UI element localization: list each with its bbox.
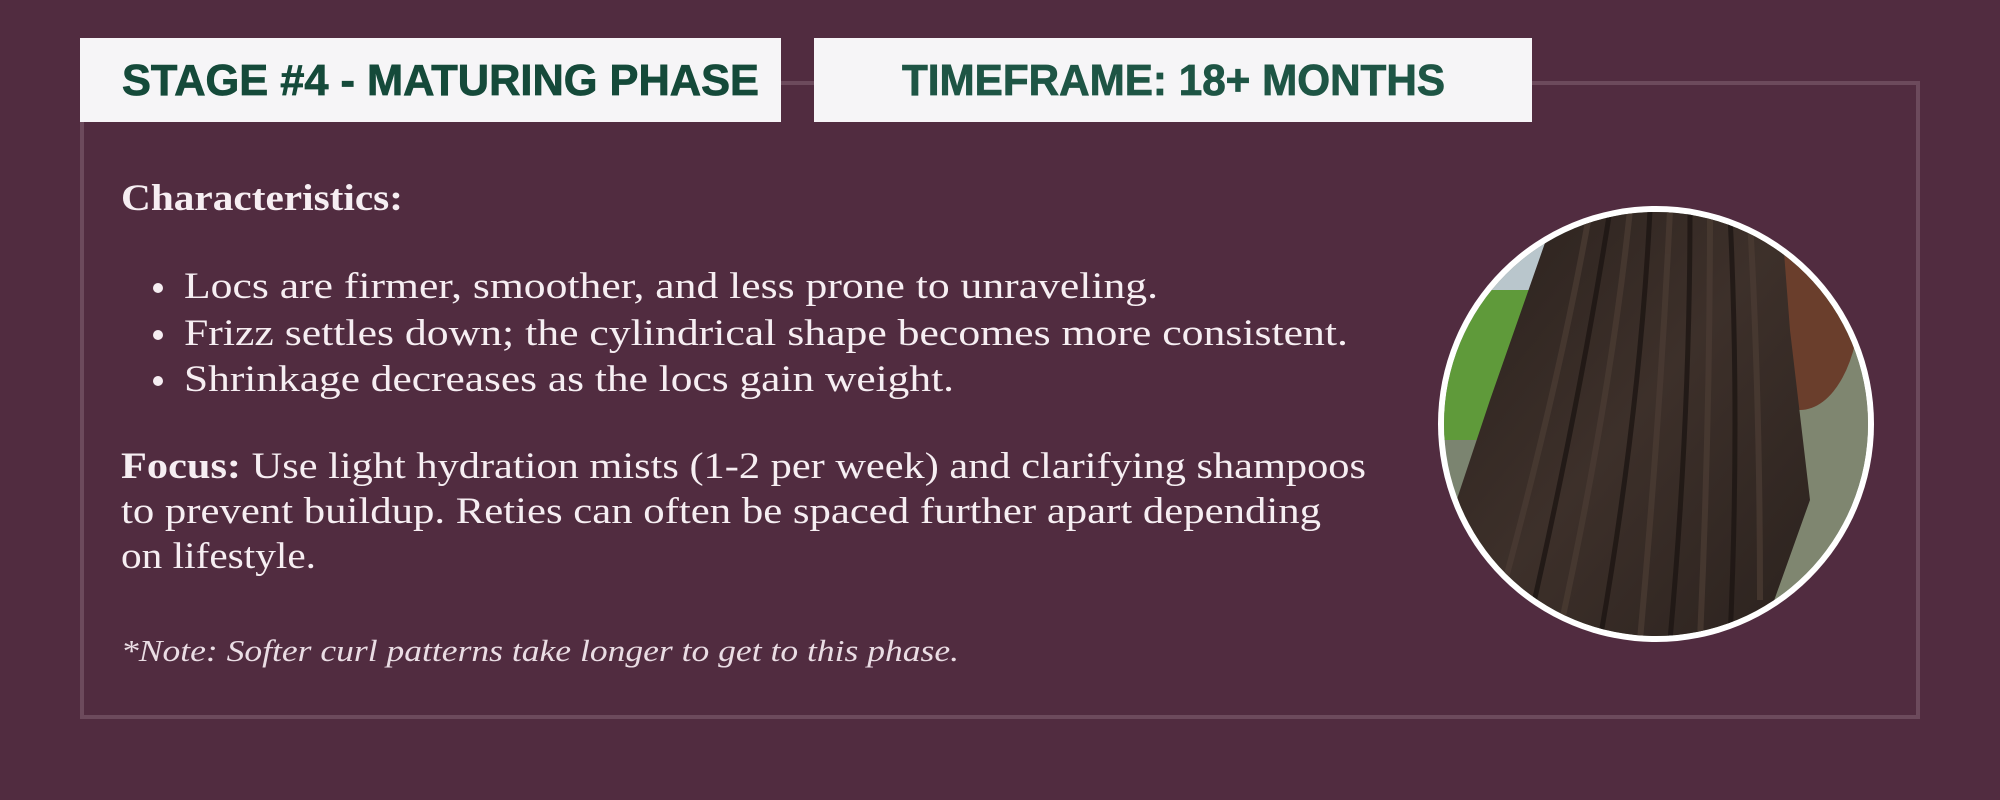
text block: characteristics: Shrinkage decreases as the locs gain weight.: [184, 359, 954, 400]
text block: focus: Focus: Use light hydration mists (1-2 per week) and clarifying shampoos: [121, 446, 1366, 487]
text block: focus: on lifestyle.: [121, 536, 316, 577]
heading: stage label: [80, 38, 781, 122]
photo: locs in circle: [1438, 190, 1880, 642]
text block: characteristics: [121, 178, 1348, 400]
text block: focus: to prevent buildup. Reties can often be spaced further apart depending: [121, 491, 1321, 532]
heading: stage label: STAGE #4 - MATURING PHASE: [122, 56, 759, 105]
text block: characteristics: Locs are firmer, smoother, and less prone to unraveling.: [184, 266, 1158, 307]
heading: timeframe label: [814, 38, 1532, 122]
text block: characteristics: Characteristics:: [121, 178, 403, 219]
text block: focus: [121, 446, 1366, 577]
note: *Note: Softer curl patterns take longer to get to this phase.: [121, 633, 959, 668]
text block: characteristics: Frizz settles down; the cylindrical shape becomes more consistent.: [184, 313, 1348, 354]
heading: timeframe label: TIMEFRAME: 18+ MONTHS: [902, 56, 1445, 105]
panel border: [82, 83, 1918, 717]
